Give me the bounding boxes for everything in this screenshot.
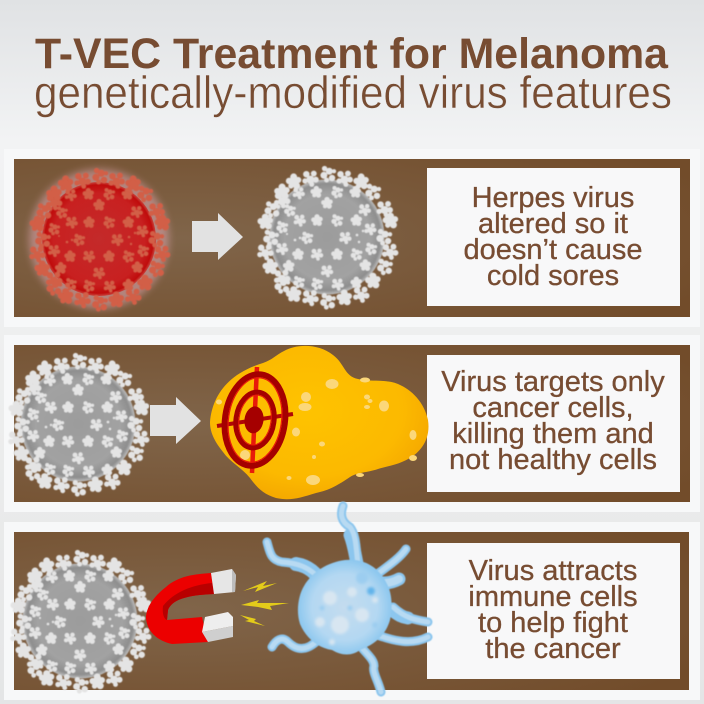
- panel: virus attracts immune cells: [4, 506, 700, 700]
- title: T-VEC Treatment for Melanoma: [35, 30, 669, 78]
- panel: virus targets cancer cells: [4, 335, 700, 512]
- title: [34, 30, 672, 118]
- icon: red virus: [29, 168, 170, 312]
- text box: not healthy cells: [449, 444, 657, 476]
- text box: Virus attracts: [469, 555, 637, 587]
- text box: [427, 168, 680, 306]
- panel: herpes virus altered: [4, 149, 700, 327]
- text box: immune cells: [468, 581, 638, 613]
- icon: immune cell: [267, 506, 428, 692]
- text box: to help fight: [478, 607, 628, 639]
- text box: cold sores: [487, 260, 619, 292]
- text box: [427, 355, 680, 492]
- text box: cancer cells,: [472, 392, 634, 424]
- icon: target: [217, 367, 293, 473]
- text box: Herpes virus: [472, 182, 634, 214]
- arrow: [192, 213, 243, 260]
- text box: altered so it: [478, 208, 628, 240]
- icon: cancer cell: [210, 346, 429, 499]
- icon: magnet: [146, 569, 236, 644]
- text box: the cancer: [485, 633, 621, 665]
- text box: doesn’t cause: [464, 234, 642, 266]
- arrow: [150, 397, 201, 444]
- icon: gray virus: [10, 550, 151, 694]
- icon: lightning bolts: [240, 581, 289, 626]
- text box: killing them and: [452, 418, 654, 450]
- icon: gray virus: [257, 166, 398, 310]
- icon: gray virus: [8, 353, 149, 497]
- text box: Virus targets only: [441, 366, 665, 398]
- text box: [427, 543, 680, 679]
- title: genetically-modified virus features: [34, 67, 672, 118]
